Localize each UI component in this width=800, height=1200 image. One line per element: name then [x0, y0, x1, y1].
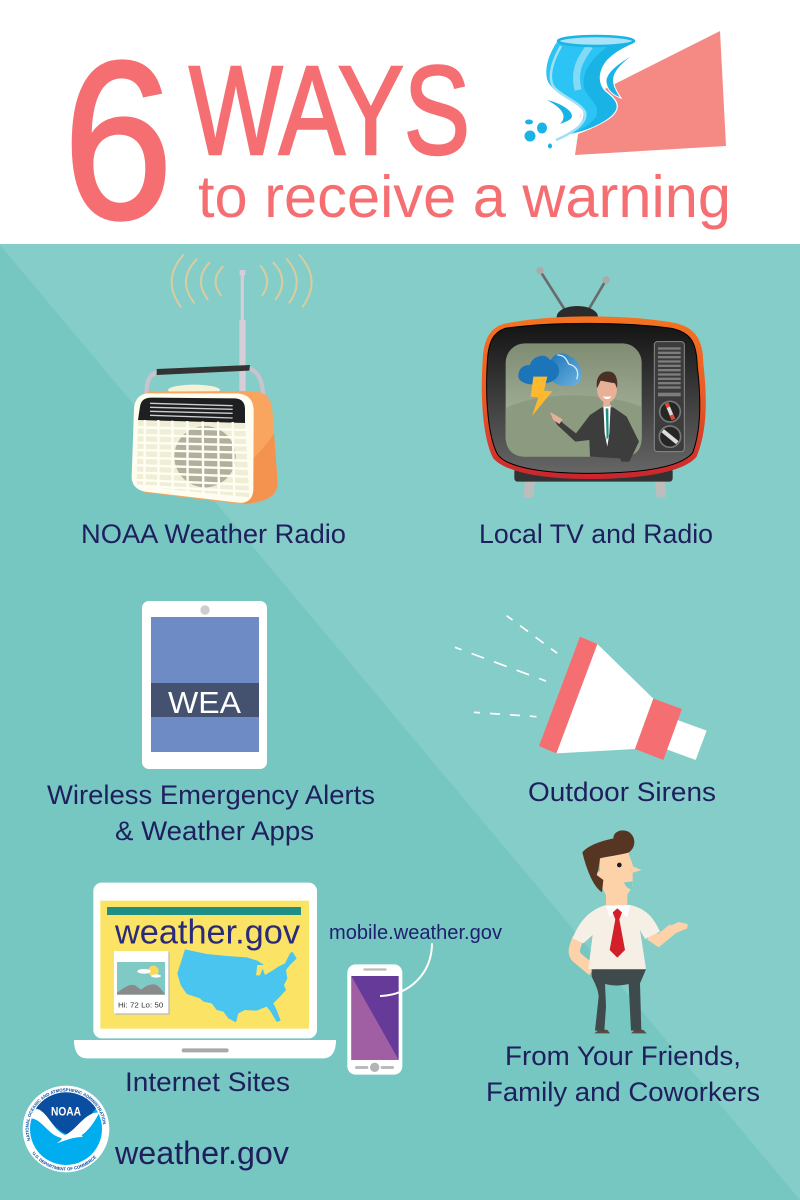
laptop lid — [93, 883, 317, 1038]
radio body — [143, 391, 278, 504]
subtitle: to receive a warning — [198, 164, 731, 230]
icon: tornado — [524, 31, 726, 155]
radio waves — [172, 255, 312, 307]
antenna — [239, 270, 246, 392]
laptop base — [74, 1040, 336, 1058]
title numeral 6: 6 — [63, 14, 173, 266]
funnel — [537, 41, 633, 145]
pink wedge — [575, 31, 726, 155]
label: Internet Sites: Internet Sites — [125, 1067, 290, 1097]
droplets — [525, 120, 533, 124]
NOAA logo — [22, 1086, 110, 1172]
shirt — [573, 905, 660, 969]
US map — [177, 949, 297, 1022]
grille — [137, 420, 249, 497]
label: Outdoor Sirens: Outdoor Sirens — [528, 777, 716, 807]
NOAA logo: U.S. DEPARTMENT OF COMMERCE — [32, 1152, 96, 1170]
icon: weather radio — [132, 255, 312, 504]
knobs — [660, 401, 680, 422]
control panel — [654, 342, 684, 452]
phone — [347, 964, 402, 1075]
handle — [147, 368, 264, 413]
label: mobile.weather.gov: mobile.weather.gov — [329, 922, 502, 944]
weather card — [115, 952, 170, 1015]
label: and Weather Apps: & Weather Apps — [115, 816, 314, 846]
callout line — [380, 943, 432, 996]
icon: laptop and phone — [74, 883, 432, 1075]
label: Family and Coworkers: Family and Coworkers — [486, 1077, 760, 1107]
title word WAYS: WAYS — [189, 40, 470, 181]
screen — [506, 343, 642, 457]
tv casing — [482, 316, 706, 479]
head — [600, 853, 642, 906]
collar and tie — [606, 905, 630, 917]
radio front — [132, 393, 254, 503]
label: Wireless Emergency Alerts: Wireless Emergency Alerts — [47, 780, 375, 810]
label: NOAA Weather Radio: NOAA Weather Radio — [81, 519, 346, 549]
teal background — [0, 244, 800, 1200]
icon: siren megaphone — [455, 616, 707, 760]
label: From Your Friends: From Your Friends, — [505, 1041, 741, 1071]
header background — [0, 0, 800, 244]
dial lines — [150, 403, 233, 418]
legs — [523, 480, 535, 497]
sound lines — [455, 616, 557, 717]
storm cloud and lightning — [518, 353, 581, 416]
title — [63, 14, 731, 266]
swirl pieces — [606, 50, 640, 98]
website title: weather.gov — [114, 913, 300, 951]
shoes — [594, 1029, 610, 1033]
NOAA logo: NATIONAL OCEANIC AND ATMOSPHERIC ADMINISTRATION — [26, 1088, 106, 1141]
arms — [574, 938, 593, 971]
antenna — [540, 271, 606, 310]
icon: person — [573, 830, 688, 1033]
icon: laptop and phone: Hi: 72 Lo: 50 — [118, 1001, 163, 1010]
icon: tablet with WEA: WEA — [168, 685, 241, 720]
footer url: weather.gov — [114, 1135, 289, 1171]
icon: tablet with WEA — [142, 601, 267, 769]
speaker — [174, 426, 236, 487]
hair — [582, 830, 634, 892]
trousers — [592, 969, 646, 1031]
label: Local TV and Radio: Local TV and Radio — [479, 519, 713, 549]
NOAA logo: NOAA — [51, 1105, 81, 1119]
presenter — [550, 372, 639, 462]
icon: television — [482, 267, 706, 497]
